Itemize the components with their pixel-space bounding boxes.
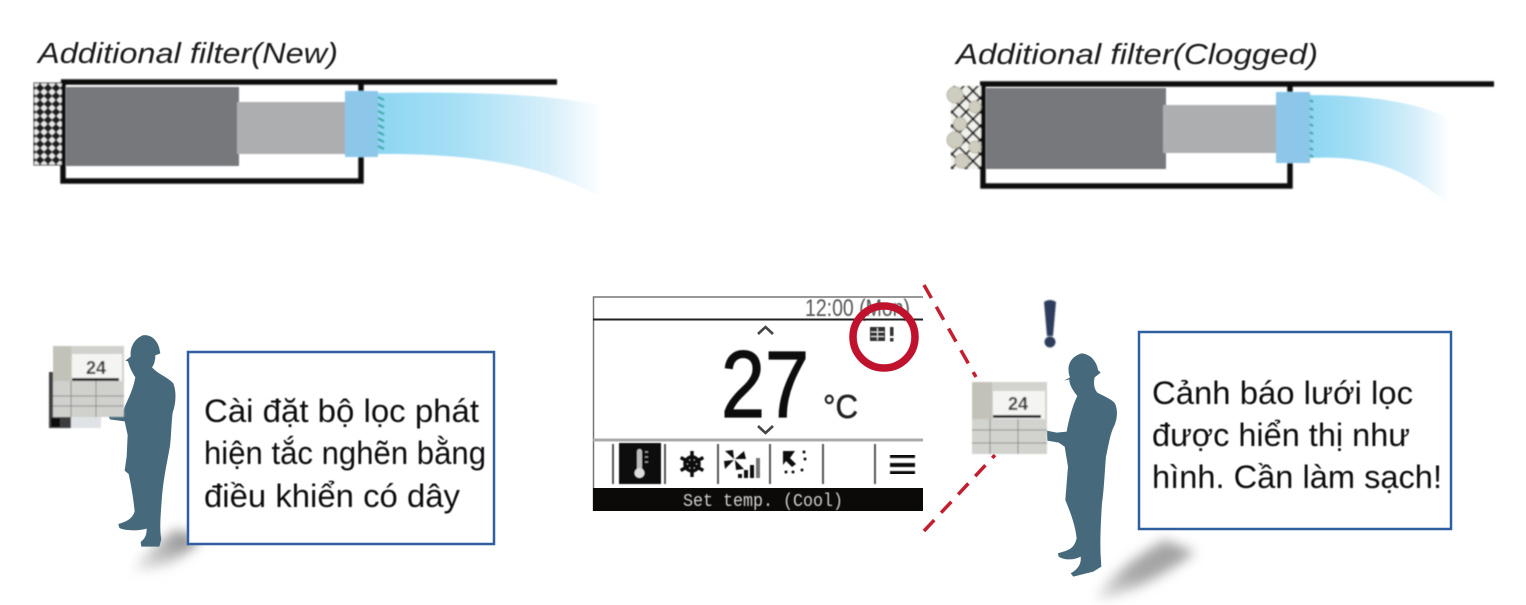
panel: additional filter clogged [947,39,1494,206]
chevron up [758,327,773,334]
motor body [986,88,1166,169]
icon: exclamation mark [1044,300,1056,348]
air flow [1310,95,1450,206]
callout: left instruction: điều khiển có dây [204,478,460,514]
duct frame [980,84,1494,186]
status bar [593,488,923,511]
shadow: left worker [132,530,200,572]
callout: right warning: Cảnh báo lưới lọc [1152,375,1413,411]
callout: right warning: hình. Cần làm sạch! [1152,459,1442,495]
panel: additional filter new [34,38,604,200]
screen frame [594,297,923,511]
diagram: unit with clogged filter [947,84,1494,206]
person: right worker [1047,353,1117,577]
icon: fan speed [724,450,760,478]
icon: filter warning [870,327,894,342]
chevron down [758,426,773,433]
remote screen [993,391,1045,419]
icon: menu [890,456,915,473]
device: right wired remote: 24 [1008,394,1028,414]
device: left wired remote: 24 [86,358,106,378]
shaft [1163,105,1277,153]
remote rear unit [49,372,71,428]
clogged filter mesh [947,86,981,169]
temperature unit: °C [823,388,858,425]
highlight circle [853,306,915,368]
dashed line: upper callout leader [924,285,976,377]
status text: Set temp. (Cool) [683,492,843,512]
new filter mesh [34,83,62,165]
lower rule [593,438,923,442]
motor body [66,87,239,166]
dashed line: lower callout leader [924,455,995,531]
callout: right warning [1139,332,1451,529]
callout: right warning: được hiển thị như [1152,417,1410,453]
icon: air direction [783,450,806,474]
fan [345,91,378,157]
callout: left instruction [188,352,495,544]
heading: additional filter clogged: Additional filter(Clogged) [954,39,1318,71]
remote screen [72,354,122,381]
device: right wired remote [972,382,1047,454]
heading: additional filter new: Additional filter(New) [36,38,338,70]
callout: left instruction: hiện tắc nghẽn bằng [204,435,486,471]
fan [1276,92,1310,163]
diagram: unit with new filter [34,82,604,200]
temperature value: 27 [721,332,809,438]
fan blades [1310,100,1313,157]
air flow [378,93,604,200]
remote front panel [53,346,124,417]
clock text: 12:00 (Mon) [805,295,910,322]
fan blades [378,97,384,149]
icon: thermometer [619,443,661,484]
icon: snowflake [681,451,703,477]
header rule [593,318,923,320]
device: left wired remote [49,346,124,428]
icon separators [613,444,875,484]
shadow: right worker [1096,540,1195,600]
shaft [237,102,346,154]
person: left worker [109,335,176,547]
duct frame [61,82,557,181]
remote display enlarged [593,295,923,512]
callout: left instruction: Cài đặt bộ lọc phát [204,393,479,429]
